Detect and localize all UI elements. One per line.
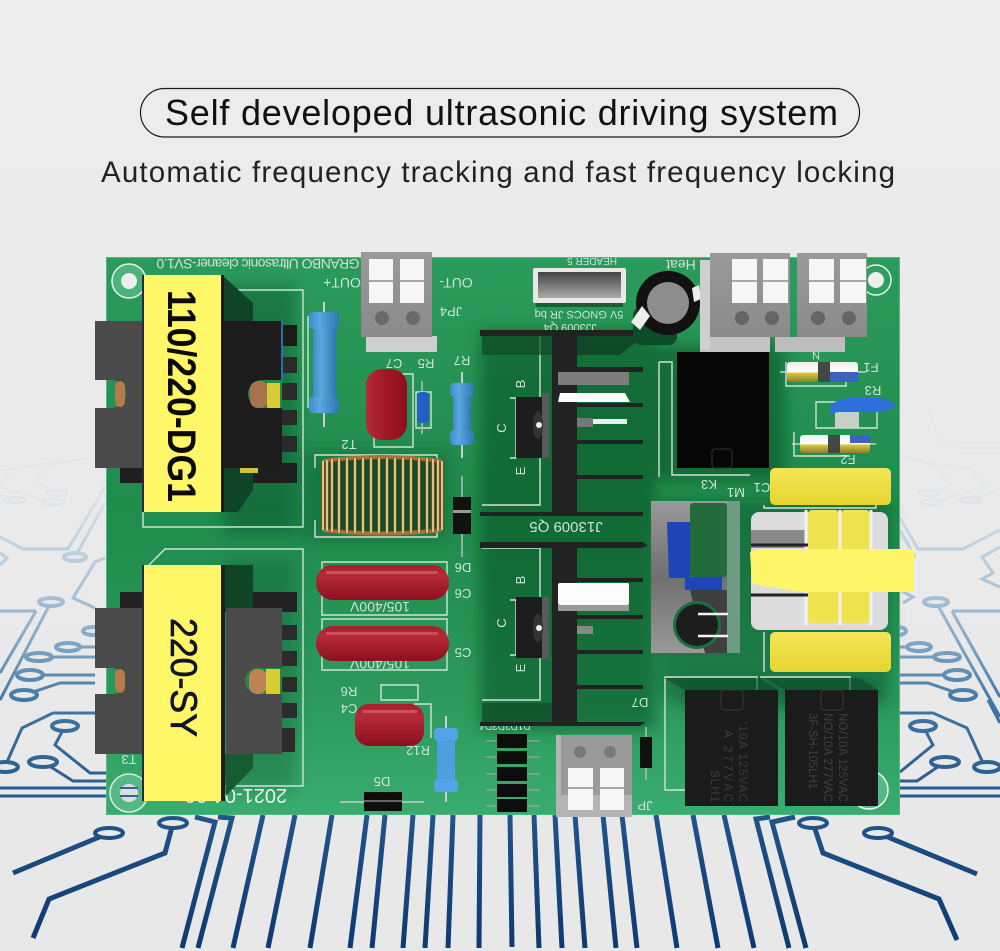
silkscreen text: J13009 Q5 xyxy=(529,518,603,535)
silkscreen text: HEADER 5 xyxy=(567,255,617,266)
silkscreen text: N xyxy=(812,349,820,361)
silkscreen text: C7 xyxy=(386,356,402,371)
silkscreen text: R3 xyxy=(865,383,881,398)
red capacitor C4 xyxy=(355,704,424,746)
yellow capacitor C2 xyxy=(770,632,891,672)
heatsink Q5 xyxy=(480,542,648,726)
silkscreen text: R7 xyxy=(454,353,470,368)
small blue resistor R5 xyxy=(417,381,429,434)
blue resistor R12 xyxy=(434,716,458,802)
transformer 110/220-DG1: 110/220-DG1 xyxy=(159,290,203,502)
left traces xyxy=(0,457,106,796)
mounting holes xyxy=(110,264,891,812)
silkscreen text: D5 xyxy=(374,774,390,789)
connector JP4 xyxy=(361,252,437,352)
diode D6 xyxy=(453,476,471,557)
diode D7 xyxy=(640,727,652,780)
relay right xyxy=(764,678,878,806)
silkscreen text: T3 xyxy=(121,752,137,767)
blue resistor large xyxy=(309,302,339,427)
heatsink Q4 xyxy=(480,330,648,516)
silkscreen text: E xyxy=(513,663,528,672)
electrolytic capacitor xyxy=(631,271,701,345)
silkscreen text: D6 xyxy=(455,560,471,575)
yellow capacitor C1 xyxy=(770,468,891,505)
silkscreen text: B xyxy=(513,380,528,388)
silkscreen text: E xyxy=(513,466,528,475)
header connector xyxy=(533,268,626,307)
relay right: NO/10A 125VAC xyxy=(836,713,848,802)
silkscreen text: 5V GNOCS JR bq xyxy=(535,308,623,320)
silkscreen text: C1 xyxy=(754,480,770,495)
silkscreen text: C4 xyxy=(341,701,357,716)
silkscreen text: OUT+ xyxy=(323,275,361,291)
silkscreen text: C xyxy=(494,423,509,433)
silkscreen text: M1 xyxy=(727,485,745,500)
silkscreen text: JJ3009 Q4 xyxy=(543,321,597,333)
grey module M1 xyxy=(651,501,740,653)
silkscreen text: JP4 xyxy=(440,304,462,319)
silkscreen text: C5 xyxy=(455,645,471,660)
relay right: NO/10A 277VAC xyxy=(821,713,833,802)
title pill: Self developed ultrasonic driving system xyxy=(165,92,838,133)
transformer 220-SY: 220-SY xyxy=(163,618,204,737)
silkscreen text: F1 xyxy=(863,360,879,375)
toroid inductor T2 xyxy=(321,457,443,534)
PCB board xyxy=(106,257,900,815)
silkscreen text xyxy=(121,255,881,813)
diode array xyxy=(486,734,540,812)
silkscreen text: OUT- xyxy=(439,275,473,291)
green capacitor xyxy=(690,503,727,577)
relay right: 3F-SH-105LH1 xyxy=(806,713,818,789)
pins xyxy=(280,325,297,452)
diode D5 xyxy=(340,792,424,811)
relay left xyxy=(664,678,778,806)
silkscreen text: K3 xyxy=(701,477,717,492)
silkscreen text: GRANBO Ultrasonic cleaner-SV1.0 xyxy=(156,256,360,272)
relay left: '10A 125VAC xyxy=(736,722,748,802)
silkscreen text: D7 xyxy=(632,695,648,710)
connector JP xyxy=(556,735,632,817)
circuit traces background xyxy=(0,390,1000,948)
silkscreen text: 105/400V xyxy=(349,656,410,672)
common mode choke xyxy=(750,510,914,630)
silkscreen text: D1D2D3D4 xyxy=(479,720,531,731)
silkscreen text: C xyxy=(494,618,509,628)
blue link R3 xyxy=(830,397,896,414)
silkscreen text: JP xyxy=(637,798,653,813)
silkscreen text: R12 xyxy=(406,743,430,758)
silkscreen text: 105/400V xyxy=(349,599,410,615)
silkscreen text: R6 xyxy=(341,684,357,699)
silkscreen text: C6 xyxy=(455,586,471,601)
fuse F2 xyxy=(792,435,876,453)
round capacitor xyxy=(673,601,728,649)
transistor Q4 xyxy=(516,393,549,458)
red capacitor C7 xyxy=(366,369,407,440)
silkscreen outlines and labels xyxy=(121,255,881,813)
yellow label xyxy=(142,275,145,512)
fuse F1 xyxy=(780,362,866,382)
connector J terminal pair xyxy=(700,253,867,352)
yellow band xyxy=(750,549,914,592)
subtitle: Automatic frequency tracking and fast frequency locking xyxy=(101,156,895,189)
board shadows xyxy=(225,285,890,790)
core xyxy=(95,321,144,468)
silkscreen text: F2 xyxy=(840,452,856,467)
transistor Q5 xyxy=(516,597,549,659)
silkscreen text: T2 xyxy=(341,437,357,452)
white link base xyxy=(835,412,859,428)
blue component xyxy=(667,522,722,590)
bottom rays xyxy=(13,815,977,948)
transformer 110/220-DG1 xyxy=(95,275,297,512)
relay left: A 277VAC xyxy=(721,730,733,802)
silkscreen text: 2021-04-06 xyxy=(185,784,287,806)
blue resistor R7 xyxy=(450,372,474,458)
silkscreen text: R5 xyxy=(418,356,434,371)
red capacitors C6 and C5 xyxy=(316,565,449,661)
silkscreen text: Heat xyxy=(666,257,696,273)
transformer 220-SY xyxy=(95,565,297,801)
relay left: SLH1 xyxy=(708,770,720,802)
trace pads xyxy=(0,490,1000,838)
relay K3 xyxy=(677,352,769,468)
right traces xyxy=(900,390,1000,796)
silkscreen text: B xyxy=(513,576,528,584)
